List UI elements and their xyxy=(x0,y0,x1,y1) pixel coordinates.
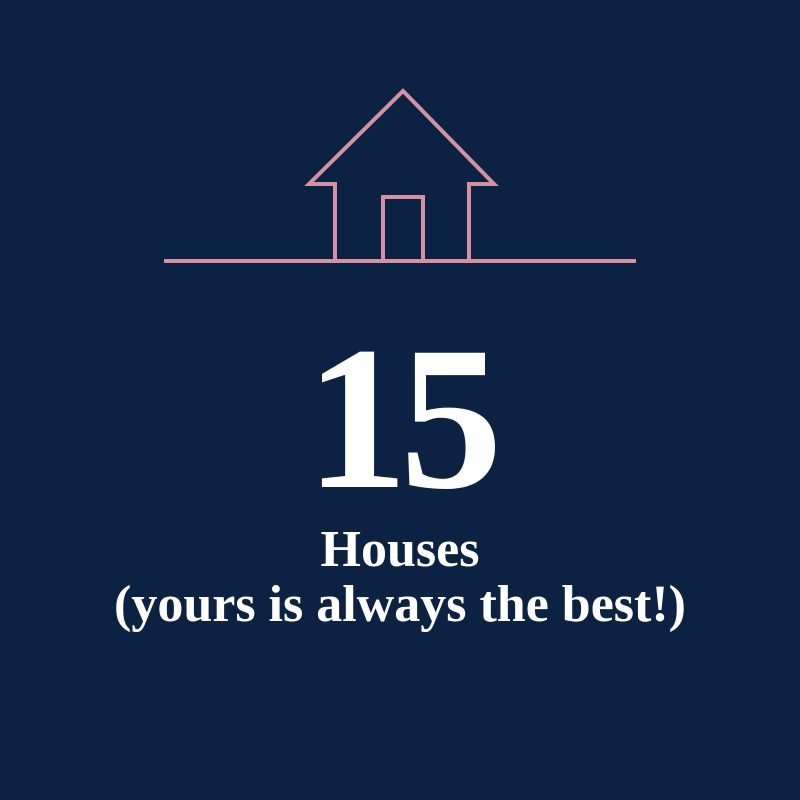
icon: house on ground line xyxy=(164,88,636,263)
label: (yours is always the best!) xyxy=(114,576,686,633)
label: Houses xyxy=(321,521,479,578)
label xyxy=(114,521,686,633)
big number: 15 xyxy=(306,305,494,532)
